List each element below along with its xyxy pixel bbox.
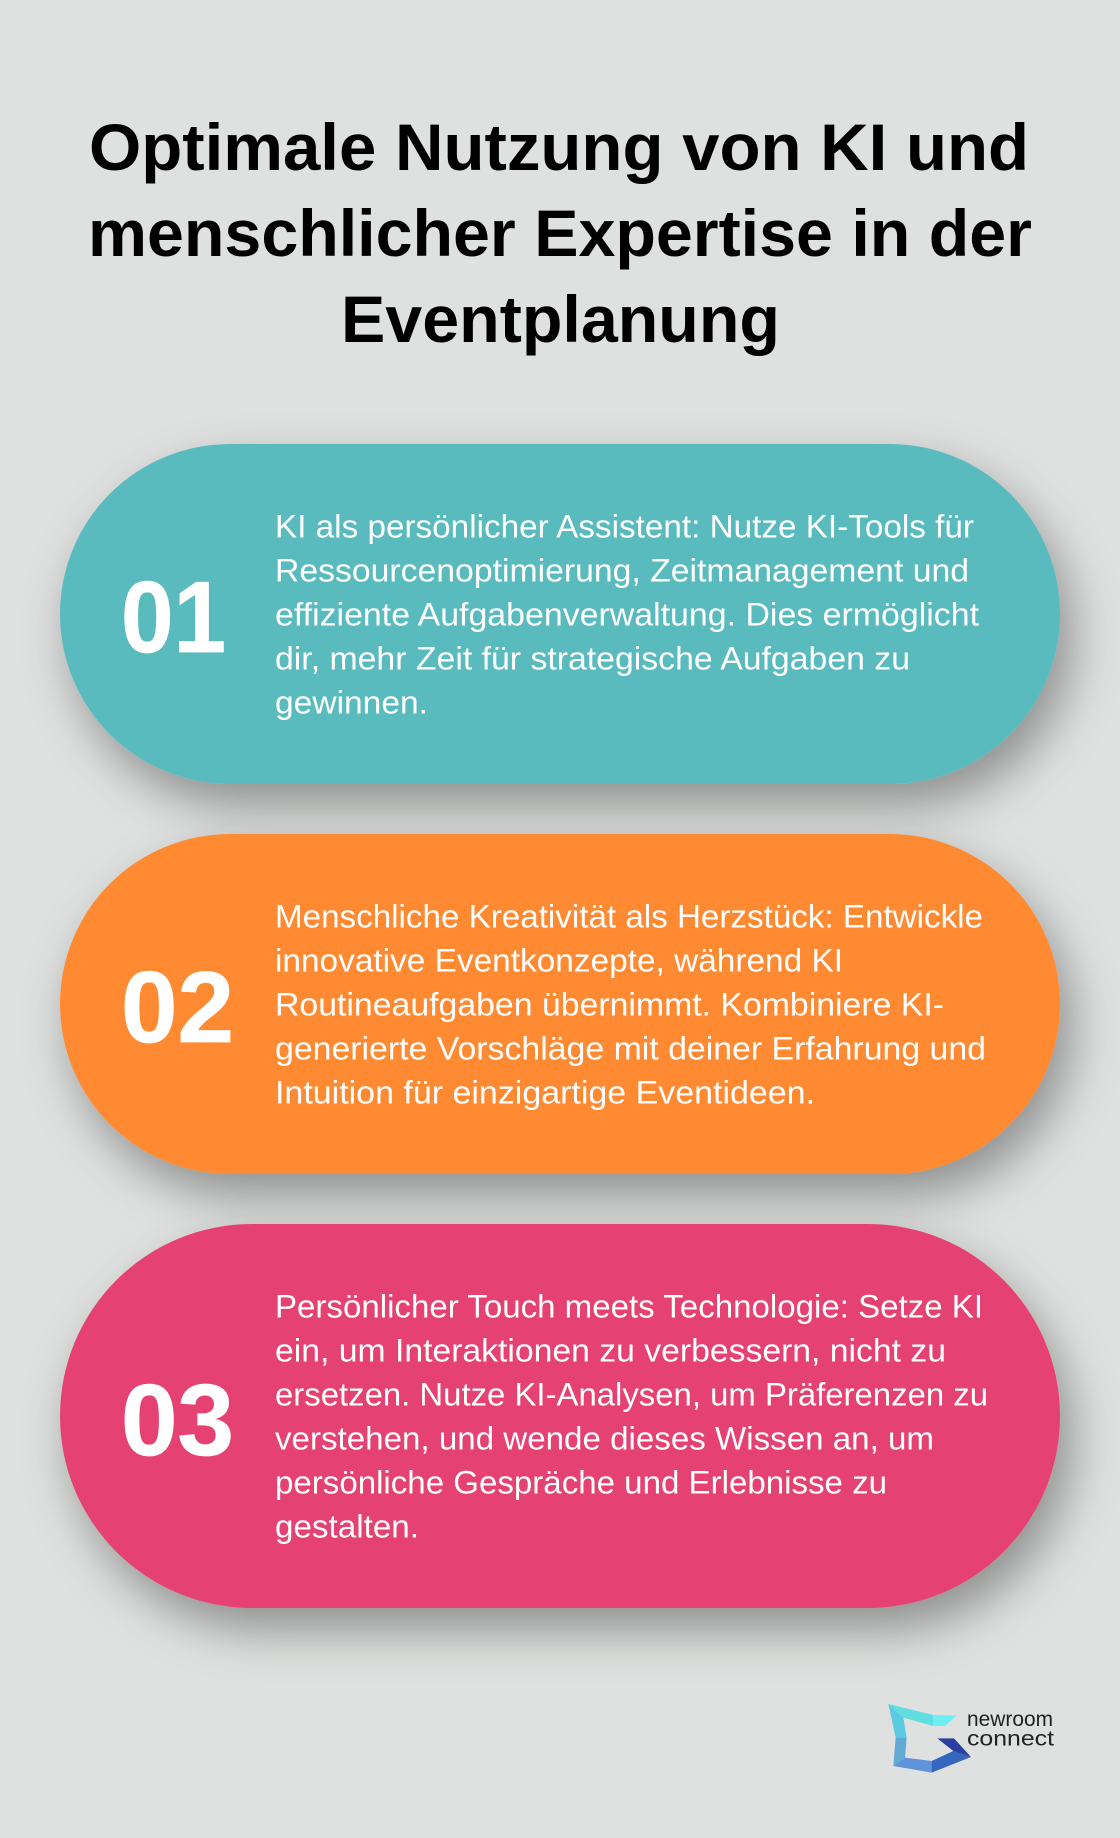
pill background pink [60, 1224, 1060, 1608]
text block 03 [275, 1288, 988, 1544]
icon: faceted logo mark [888, 1704, 971, 1773]
number 01: 01 [121, 562, 226, 674]
text block 01: Ressourcenoptimierung, Zeitmanagement und [275, 552, 969, 588]
text block 02: Intuition für einzigartige Eventideen. [275, 1074, 815, 1110]
logo: newroom connect [888, 1704, 1054, 1773]
text block 01: dir, mehr Zeit für strategische Aufgaben zu [275, 640, 910, 676]
text block 03: gestalten. [275, 1508, 419, 1544]
pill background orange [60, 834, 1060, 1174]
logo wordmark: newroom [967, 1708, 1053, 1731]
panel: step 02 [60, 834, 1060, 1174]
title: menschlicher Expertise in der [88, 196, 1032, 270]
text block 02: generierte Vorschläge mit deiner Erfahrung und [275, 1030, 986, 1066]
number 03: 03 [121, 1365, 234, 1477]
text block 03: persönliche Gespräche und Erlebnisse zu [275, 1464, 887, 1500]
logo wordmark [967, 1708, 1054, 1750]
panel: step 03 [60, 1224, 1060, 1608]
text block 03: ein, um Interaktionen zu verbessern, nicht zu [275, 1332, 946, 1368]
text block 02: Routineaufgaben übernimmt. Kombiniere KI- [275, 986, 944, 1022]
text block 03: verstehen, und wende dieses Wissen an, um [275, 1420, 934, 1456]
number 02: 02 [121, 952, 234, 1064]
text block 01 [275, 508, 979, 720]
pill background teal [60, 444, 1060, 784]
panel: step 01 [60, 444, 1060, 784]
text block 01: KI als persönlicher Assistent: Nutze KI-Tools für [275, 508, 974, 544]
text block 01: effiziente Aufgabenverwaltung. Dies ermöglicht [275, 596, 979, 632]
text block 02: innovative Eventkonzepte, während KI [275, 942, 843, 978]
title [88, 110, 1032, 356]
text block 02: Menschliche Kreativität als Herzstück: Entwickle [275, 898, 983, 934]
text block 01: gewinnen. [275, 684, 428, 720]
logo wordmark: connect [967, 1728, 1054, 1750]
text block 03: Persönlicher Touch meets Technologie: Setze KI [275, 1288, 983, 1324]
text block 03: ersetzen. Nutze KI-Analysen, um Präferenzen zu [275, 1376, 988, 1412]
text block 02 [275, 898, 986, 1110]
title: Eventplanung [341, 282, 780, 356]
title: Optimale Nutzung von KI und [89, 110, 1029, 184]
